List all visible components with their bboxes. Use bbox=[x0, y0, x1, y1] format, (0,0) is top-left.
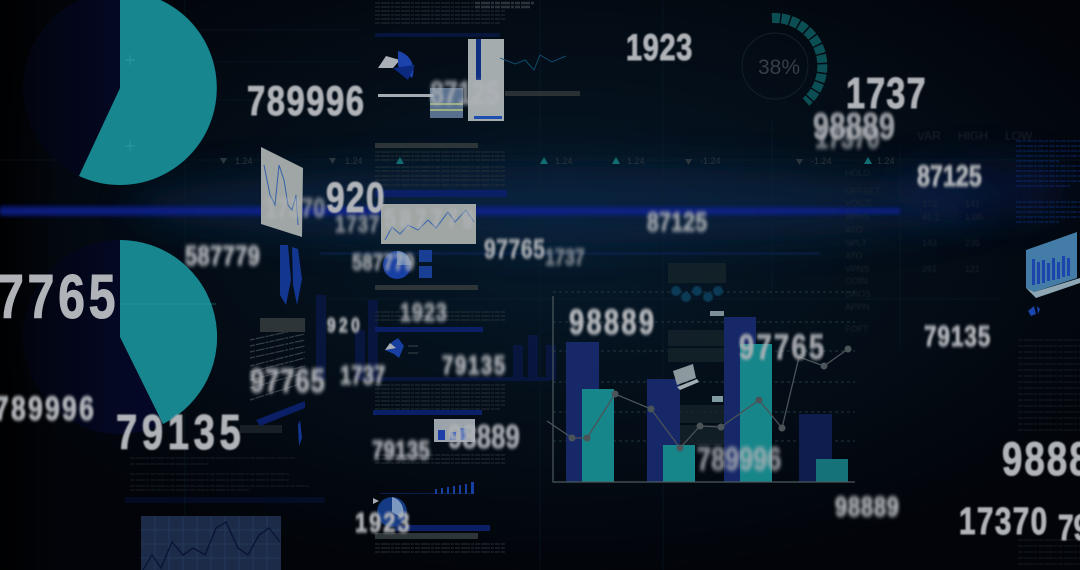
data table: FOFT bbox=[845, 324, 869, 334]
small pie lower bbox=[385, 338, 418, 358]
small blue pie top bbox=[378, 51, 415, 80]
blue text block right bbox=[1016, 141, 1080, 222]
pie chart: lower bbox=[23, 240, 217, 434]
solid grey section bars bbox=[240, 91, 580, 539]
floating numbers: 97765 bbox=[739, 328, 824, 367]
data table: HIGH bbox=[958, 129, 988, 143]
floating numbers: 920 bbox=[326, 174, 384, 222]
data table: 141 bbox=[965, 199, 980, 209]
bar chart with line overlay bbox=[547, 263, 855, 482]
blue fan shapes bbox=[280, 245, 302, 446]
floating numbers: 98889 bbox=[569, 303, 654, 342]
floating numbers: 1737 bbox=[545, 245, 585, 271]
data table: ATO bbox=[845, 225, 863, 235]
small pie bottom bbox=[377, 497, 407, 527]
panel: tall grey report bbox=[468, 39, 566, 121]
floating numbers: 17370 bbox=[265, 194, 325, 224]
mini bar strip bbox=[373, 482, 474, 504]
data table: 173 bbox=[922, 199, 937, 209]
3D bar chart icon bbox=[1026, 232, 1080, 316]
data table: APPN bbox=[845, 302, 870, 312]
data table: SPLT bbox=[845, 238, 867, 248]
floating numbers: 79135 bbox=[442, 351, 505, 380]
gauge 38% bbox=[742, 18, 822, 102]
data table: 121 bbox=[965, 264, 980, 274]
data table: 261 bbox=[922, 264, 937, 274]
laptop icon bbox=[673, 311, 724, 402]
data table: OFFSET bbox=[845, 186, 881, 196]
floating numbers: 87125 bbox=[647, 208, 707, 238]
ticker row: 1.24 bbox=[627, 156, 645, 166]
floating numbers: 1923 bbox=[355, 507, 410, 539]
horizontal light beam bbox=[0, 205, 1000, 255]
floating numbers: 1923 bbox=[400, 299, 447, 327]
data table: VAR bbox=[917, 129, 941, 143]
back bar chart in column bbox=[316, 295, 556, 381]
floating numbers: 98889 bbox=[448, 419, 520, 456]
data table: COIN bbox=[845, 276, 868, 286]
ticker row: 1.24 bbox=[235, 156, 253, 166]
data table: ATO bbox=[845, 251, 863, 261]
line series bbox=[547, 346, 852, 452]
data table: HOLD bbox=[845, 168, 871, 178]
floating numbers: 587779 bbox=[384, 205, 474, 235]
floating numbers: 1737 bbox=[340, 361, 385, 390]
floating numbers: 98889 bbox=[813, 107, 895, 148]
hexagon dots bbox=[671, 286, 723, 302]
gauge 38%: 38% bbox=[758, 56, 800, 79]
small blue pie middle bbox=[383, 250, 432, 279]
panel: wide grey line chart bbox=[381, 204, 476, 244]
floating numbers: 97765 bbox=[250, 363, 325, 400]
data table: 143 bbox=[922, 238, 937, 248]
floating numbers: 587779 bbox=[185, 240, 260, 272]
ticker row: 1.24 bbox=[345, 156, 363, 166]
data table: LOW bbox=[1005, 129, 1033, 143]
floating numbers: 789996 bbox=[247, 77, 364, 124]
floating numbers: 920 bbox=[327, 314, 360, 336]
floating numbers: 98889 bbox=[835, 491, 899, 523]
data table: 41.1 bbox=[922, 212, 940, 222]
chart tiles under number bbox=[378, 88, 463, 118]
floating numbers: 17370 bbox=[959, 501, 1047, 543]
panel: small grey with blue bars bbox=[434, 419, 475, 442]
data table: 1.00 bbox=[965, 212, 983, 222]
ticker row: -1.24 bbox=[811, 156, 832, 166]
data table: 235 bbox=[965, 238, 980, 248]
data table bbox=[845, 129, 1033, 334]
data table: VOICE bbox=[845, 198, 873, 208]
ticker row: -1.24 bbox=[700, 156, 721, 166]
blue section bars bbox=[125, 33, 507, 531]
floating numbers: 79135 bbox=[372, 436, 430, 465]
floating numbers: 87125 bbox=[917, 159, 982, 193]
floating numbers: 587779 bbox=[352, 250, 414, 276]
ticker row bbox=[220, 156, 895, 166]
data table: VPNS bbox=[845, 264, 870, 274]
floating numbers: 1737 bbox=[846, 69, 926, 118]
chart gridlines bbox=[553, 292, 855, 441]
pie chart: upper bbox=[23, 0, 217, 185]
dark text block behind chart bbox=[668, 263, 726, 445]
floating numbers: 87125 bbox=[430, 76, 499, 112]
floating numbers: 79135 bbox=[116, 406, 241, 460]
floating numbers: 1923 bbox=[626, 28, 692, 69]
ticker row: 1.24 bbox=[877, 156, 895, 166]
data table: APNS bbox=[845, 212, 870, 222]
floating numbers: 789996 bbox=[697, 442, 781, 478]
axes bbox=[553, 296, 855, 482]
floating numbers: 17370 bbox=[815, 121, 880, 155]
floating numbers: 1737 bbox=[335, 211, 379, 238]
blue bars bbox=[566, 317, 832, 482]
panel: bottom line chart bbox=[141, 516, 281, 570]
floating numbers: 97765 bbox=[484, 235, 545, 265]
ticker row: 1.24 bbox=[555, 156, 573, 166]
floating numbers: 7765 bbox=[0, 262, 116, 331]
panel: white line chart skewed bbox=[261, 147, 303, 237]
data table: DROS bbox=[845, 289, 871, 299]
teal bars bbox=[582, 344, 848, 482]
floating numbers: 79135 bbox=[924, 319, 990, 353]
